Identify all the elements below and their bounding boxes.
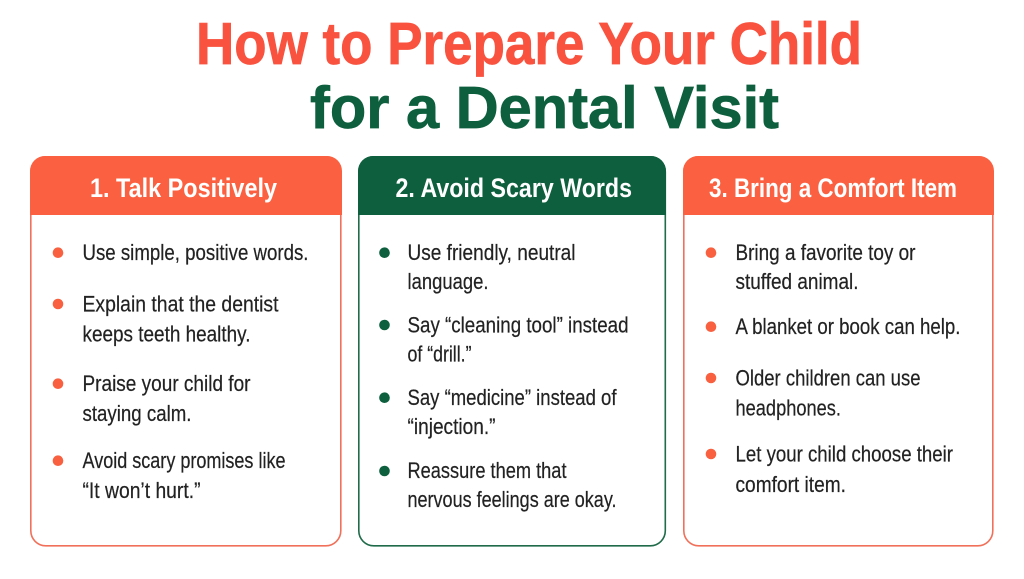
bullet: cleaning tool: Say “cleaning tool” instead	[408, 312, 628, 338]
bullet: friendly language: Use friendly, neutral	[408, 240, 576, 265]
panel: talk positively	[30, 156, 342, 546]
bullet: friendly language: language.	[408, 269, 488, 294]
panel header: bring a comfort item: 3. Bring a Comfort Item	[709, 173, 957, 203]
bullet: explain dentist: Explain that the dentist	[82, 292, 278, 316]
bullet: avoid promises	[53, 448, 286, 503]
bullet: explain dentist	[53, 292, 279, 346]
panel header: talk positively	[30, 156, 342, 215]
bullet: praise child	[53, 371, 251, 426]
bullet: explain dentist: keeps teeth healthy.	[82, 322, 250, 346]
panel header: avoid scary words: 2. Avoid Scary Words	[396, 173, 632, 203]
bullet: cleaning tool	[379, 312, 628, 366]
bullet: favorite toy: stuffed animal.	[736, 269, 858, 294]
bullet: child chooses	[706, 442, 953, 497]
bullet: headphones	[706, 366, 920, 421]
bullet: medicine	[379, 385, 617, 439]
bullet: favorite toy	[706, 240, 916, 294]
bullet: praise child: Praise your child for	[82, 371, 250, 396]
bullet: favorite toy: Bring a favorite toy or	[736, 240, 916, 265]
bullet: reassure	[379, 458, 616, 512]
panel: avoid scary words	[358, 156, 666, 546]
bullet: blanket or book: A blanket or book can help.	[736, 314, 960, 339]
bullet: medicine: “injection.”	[408, 414, 496, 439]
bullet: avoid promises: Avoid scary promises like	[82, 448, 286, 473]
bullet: avoid promises: “It won’t hurt.”	[82, 478, 200, 503]
bullet: praise child: staying calm.	[82, 401, 192, 426]
title: How to Prepare Your Child	[196, 11, 862, 77]
bullet: child chooses: comfort item.	[736, 472, 846, 497]
panel header: avoid scary words	[358, 156, 666, 215]
panel header: talk positively: 1. Talk Positively	[90, 173, 277, 203]
title	[196, 11, 862, 141]
bullet: cleaning tool: of “drill.”	[408, 342, 472, 366]
bullet: headphones: Older children can use	[736, 366, 920, 391]
bullet: medicine: Say “medicine” instead of	[408, 385, 617, 410]
bullet: headphones: headphones.	[736, 396, 841, 421]
bullet: child chooses: Let your child choose their	[736, 442, 953, 467]
bullet: reassure: Reassure them that	[408, 458, 566, 483]
panel header: bring a comfort item	[683, 156, 994, 215]
panel: bring a comfort item	[683, 156, 994, 546]
bullet: reassure: nervous feelings are okay.	[408, 487, 616, 512]
bullet: friendly language	[379, 240, 576, 294]
bullet: simple words: Use simple, positive words.	[82, 240, 308, 265]
title: for a Dental Visit	[310, 75, 779, 141]
